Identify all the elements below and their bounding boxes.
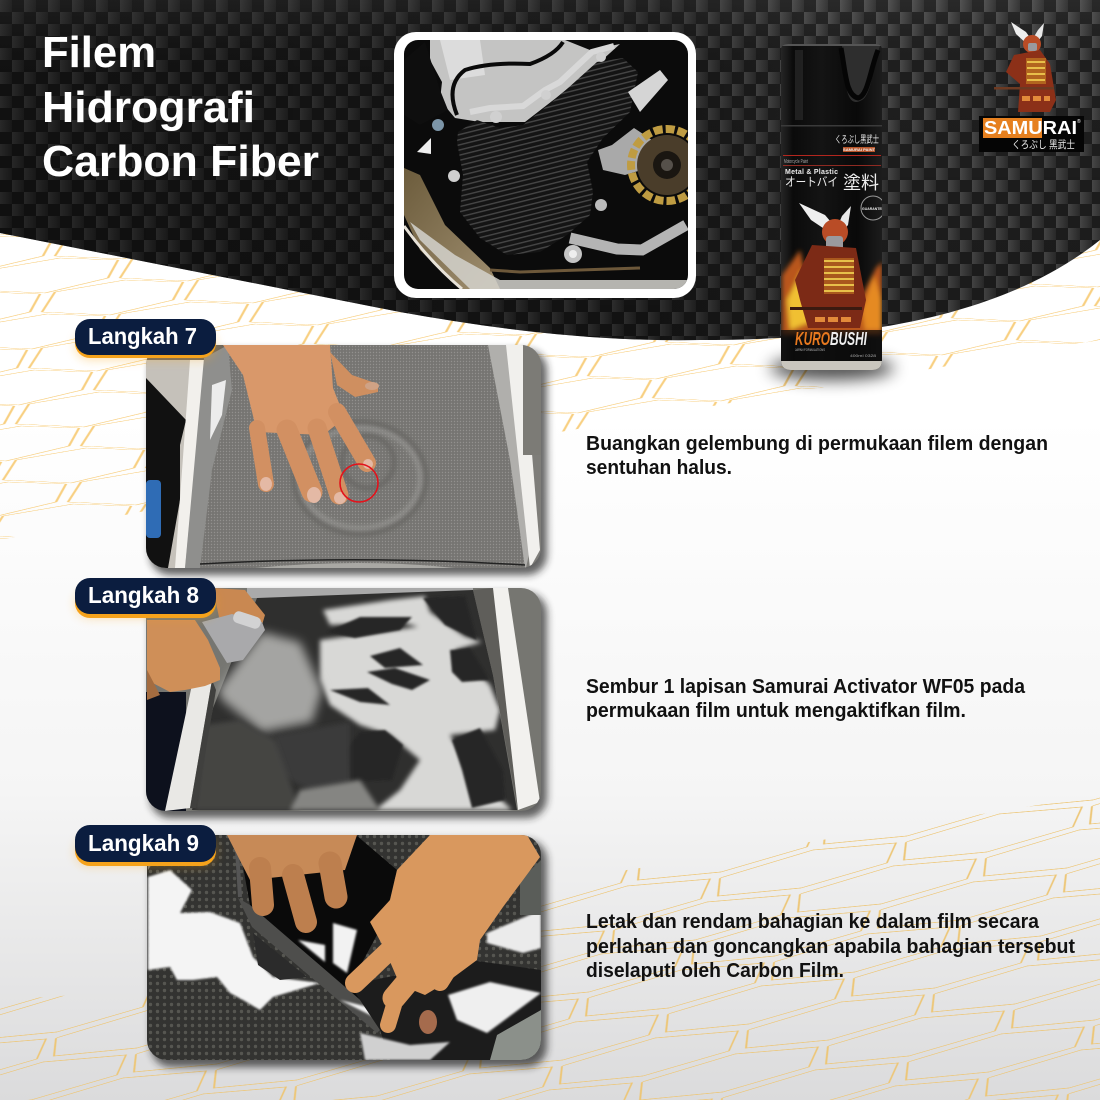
can label text: SAMURAI PAINT [843,147,876,152]
logo: Samurai wordmark: くろぶし 黑武士 [1012,138,1075,151]
can label text: Motorcycle Paint [784,159,808,165]
can label text: 塗料 [843,173,879,193]
red highlight circle [340,464,378,502]
panel: step 7 photo [146,345,547,575]
title [42,28,319,186]
hand and can [147,620,220,692]
fire on can [782,250,882,335]
photo: carbon engine cover [394,32,703,298]
badge: Langkah 7 [75,319,216,360]
can label text: くろぶし黑武士 [835,133,879,146]
product: Kurobushi spray can [770,44,894,380]
highlights on film [298,922,372,1018]
black panel and edge [243,836,397,1000]
title: Hidrografi [42,83,255,132]
badge: Langkah 8 [75,578,216,618]
text: step 7 description [586,432,1048,479]
text: step 9 description: Letak dan rendam bahagian ke dalam film secara [586,910,1040,933]
Kurobushi wordmark: KUROBUSHI [795,329,868,349]
product: Kurobushi spray can: JAPAN FORMULATIONS [795,347,825,352]
badge: Langkah 9: Langkah 9 [88,830,199,856]
badge: Langkah 7: Langkah 7 [88,323,197,349]
text: step 7 description: Buangkan gelembung di permukaan filem dengan [586,432,1048,455]
samurai on can [790,203,866,328]
text: step 8 description: Sembur 1 lapisan Samurai Activator WF05 pada [586,675,1026,698]
left hand [227,835,357,922]
white foam [148,870,320,1010]
background hexagon line pattern, lower [0,790,1100,1100]
text: step 8 description [586,675,1026,722]
bubble ripples [294,422,426,534]
badge: Langkah 8: Langkah 8 [88,582,199,608]
can label text: Metal & Plastic [785,169,838,176]
text: step 7 description: sentuhan halus. [586,456,732,479]
spray mist [218,632,322,732]
can label text: オートバイ [785,175,838,189]
text: step 8 description: permukaan film untuk mengaktifkan film. [586,699,966,722]
white foam areas [320,596,512,810]
badge: Langkah 9 [75,825,216,866]
carbon fiber header band [0,0,1100,340]
can label text [784,133,885,358]
text: step 9 description: perlahan dan goncangkan apabila bahagian tersebut [586,935,1075,958]
background hexagon line pattern, upper [0,230,1100,550]
hand [223,345,379,504]
can label text: 400ml 0328 [850,353,877,358]
logo: Samurai wordmark: SAMURAI [984,118,1077,138]
panel: step 8 photo [146,588,547,818]
logo: Samurai wordmark [979,116,1084,152]
logo: Samurai wordmark: ® [1077,118,1081,125]
text: step 9 description [586,910,1075,982]
can label text: GUARANTEE [862,206,884,211]
title: Carbon Fiber [42,137,319,186]
text: step 9 description: diselaputi oleh Carbon Film. [586,959,844,982]
title: Filem [42,28,156,77]
logo: samurai mascot [994,22,1056,112]
right hand [355,835,540,1034]
dark film patches [327,596,505,808]
panel: step 9 photo [147,835,547,1067]
frame and edges [165,680,212,811]
